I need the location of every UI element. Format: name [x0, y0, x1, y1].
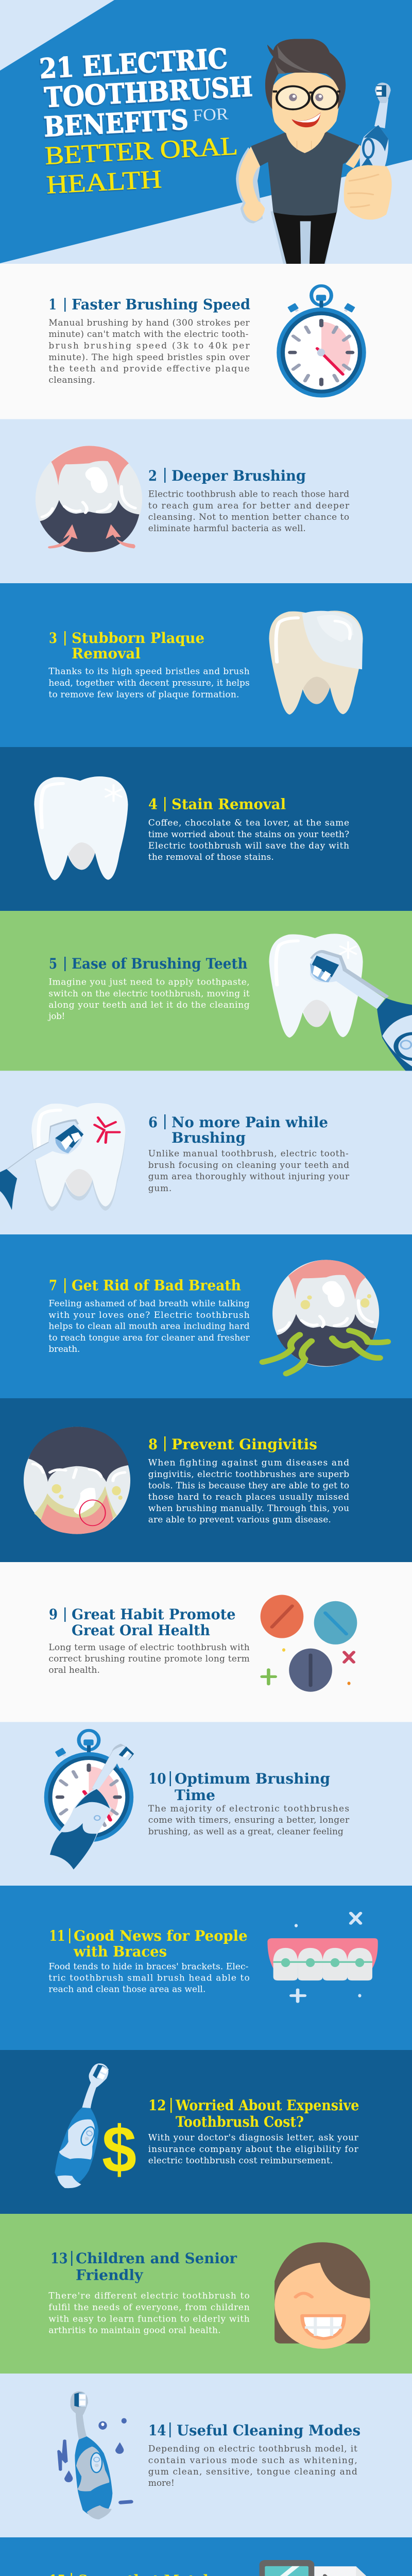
heading: Great Oral Health [72, 1622, 210, 1639]
panel: 12 toothbrush cost [0, 2050, 412, 2214]
panel: hero header [0, 0, 412, 264]
body text: more! [148, 2478, 175, 2488]
heading: 5 [49, 955, 57, 972]
body text: gum area thoroughly without injuring your [148, 1172, 350, 1182]
icon: clean tooth [34, 776, 128, 880]
body text: correct brushing routine promote long term [48, 1654, 250, 1664]
body text: job! [47, 1011, 65, 1022]
body text: brush brushing speed (3k to 40k per [48, 341, 250, 351]
body text: with your loves one? Electric toothbrush [48, 1310, 250, 1320]
body text: head, together with decent pressure, it helps [48, 678, 250, 688]
body text: With your doctor's diagnosis letter, ask your [148, 2133, 359, 2143]
icon: calculator, paper, pen and coin [260, 2560, 378, 2576]
body text: those hard to reach places usually missed [148, 1492, 349, 1502]
body text: gum. [148, 1183, 171, 1194]
body text: Imagine you just need to apply toothpaste, [48, 977, 250, 987]
body text: time worried about the stains on your teeth? [148, 829, 349, 840]
body text [148, 1804, 350, 1837]
heading: Time [175, 1787, 215, 1804]
heading: Brushing [171, 1129, 246, 1146]
body text: gum clean, sensitive, tongue cleaning and [148, 2467, 357, 2477]
icon: teeth with bacteria [263, 1260, 388, 1374]
body text: eliminate harmful bacteria as well. [148, 523, 306, 534]
icon: pills [261, 1595, 357, 1692]
body text: when brushing manually. Through this, you [148, 1503, 349, 1514]
body text: breath. [48, 1344, 80, 1354]
heading: Ease of Brushing Teeth [72, 955, 248, 972]
icon: tooth with toothbrush [269, 934, 412, 1078]
heading: Friendly [76, 2267, 143, 2284]
body text: minute). The high speed bristles spin over [48, 352, 250, 363]
heading: 8 [148, 1436, 158, 1453]
heading: 14 [148, 2422, 166, 2439]
panel: 9 great habit [0, 1562, 412, 1722]
title: better oral health: BETTER ORAL [44, 131, 238, 170]
body text: Food tends to hide in braces' brackets. Elec- [48, 1961, 248, 1972]
heading: No more Pain while [171, 1114, 328, 1131]
title: FOR: FOR [193, 105, 229, 125]
body text [148, 2133, 359, 2166]
body text: gingivitis, electric toothbrushes are superb [148, 1469, 349, 1480]
panel: 2 deeper brushing [0, 419, 412, 583]
body text: the teeth and provide effective plaque [48, 364, 250, 374]
title: better oral health: HEALTH [46, 164, 162, 199]
heading [49, 630, 204, 662]
title: bold white lines: BENEFITS [43, 104, 189, 143]
panel: 11 good news for braces [0, 1886, 412, 2050]
title: bold white lines: 21 ELECTRIC [39, 43, 229, 85]
heading: 2 [148, 467, 157, 484]
heading: Optimum Brushing [175, 1770, 330, 1787]
body text [48, 1961, 250, 1995]
panel: 4 stain removal [0, 747, 412, 911]
heading: 10 [148, 1770, 166, 1787]
heading: Useful Cleaning Modes [177, 2422, 360, 2439]
body text: to reach gum area for better and deeper [148, 501, 350, 511]
heading: Stubborn Plaque [72, 630, 204, 647]
icon: smiling face [274, 2242, 370, 2349]
body text: Unlike manual toothbrush, electric tooth- [148, 1149, 349, 1159]
body text: brushing, as well as a great, cleaner feeling [148, 1826, 344, 1837]
heading: 13 [50, 2250, 68, 2267]
body text: cleansing. [48, 375, 95, 385]
body text [48, 667, 250, 700]
heading: Stain Removal [171, 796, 286, 813]
heading [49, 1606, 236, 1639]
body text: oral health. [48, 1665, 100, 1675]
icon: toothbrush [40, 2060, 133, 2194]
heading: 3 [49, 630, 57, 647]
body text: When fighting against gum diseases and [148, 1458, 349, 1468]
body text: brush focusing on cleaning your teeth and [148, 1160, 349, 1171]
heading: Good News for People [74, 1927, 248, 1944]
title: bold white lines [39, 43, 253, 143]
heading: 4 [148, 796, 158, 813]
panel: 5 ease of brushing teeth [0, 911, 412, 1078]
body text: are able to prevent various gum disease. [148, 1515, 331, 1525]
panel: 1 faster brushing speed [0, 264, 412, 419]
body text: Long term usage of electric toothbrush with [48, 1642, 250, 1653]
illustration: man holding electric toothbrush [236, 39, 392, 264]
body text [148, 1458, 349, 1525]
body text: cleansing. Not to mention better chance to [148, 512, 349, 522]
panel: 8 prevent gingivitis [0, 1398, 412, 1562]
body text [48, 318, 250, 385]
body text [48, 2291, 250, 2336]
heading: 12 [148, 2097, 166, 2114]
body text: tools. This is because they are able to get to [148, 1481, 349, 1491]
heading [50, 2250, 237, 2284]
heading: Worried About Expensive [175, 2097, 359, 2114]
heading: 1 [48, 296, 57, 313]
body text [47, 977, 250, 1022]
body text: insurance company about the eligibility for [148, 2144, 359, 2155]
body text: helps to clean all mouth area including hard [48, 1321, 250, 1332]
body text [148, 489, 350, 534]
body text: There're different electric toothbrush to [48, 2291, 250, 2301]
title: better oral health [44, 131, 238, 199]
heading: 6 [148, 1114, 158, 1131]
heading [148, 1770, 330, 1804]
heading [148, 2097, 359, 2130]
heading [148, 1114, 328, 1146]
body text: fulfil the needs of everyone, from children [48, 2302, 250, 2313]
heading: Get Rid of Bad Breath [72, 1277, 241, 1294]
body text: with easy to learn function to elderly with [48, 2314, 250, 2325]
icon: teeth with braces [267, 1913, 378, 2002]
body text: come with timers, ensuring a better, longer [148, 1815, 350, 1825]
body text: electric toothbrush cost reimbursement. [148, 2156, 333, 2166]
body text: Manual brushing by hand (300 strokes per [48, 318, 250, 328]
body text: The majority of electronic toothbrushes [148, 1804, 349, 1814]
body text [148, 1149, 350, 1194]
body text [148, 2444, 357, 2488]
icon: plaque tooth [269, 611, 363, 715]
heading: Deeper Brushing [171, 467, 306, 484]
heading: with Braces [73, 1943, 167, 1960]
body text: along your teeth and let it do the cleaning [48, 1000, 250, 1010]
heading: Faster Brushing Speed [72, 296, 250, 313]
body text: Depending on electric toothbrush model, it [148, 2444, 357, 2454]
heading: Prevent Gingivitis [171, 1436, 317, 1453]
heading [49, 1927, 248, 1960]
icon: tooth with brush and pain mark [0, 1103, 125, 1227]
body text: to reach tongue area for cleaner and fresher [48, 1333, 250, 1343]
icon: stopwatch with toothbrush [44, 1731, 134, 1873]
body text: arthritis to maintain good oral health. [48, 2326, 221, 2336]
body text: Feeling ashamed of bad breath while talking [48, 1298, 250, 1309]
panel: 6 no more pain [0, 1071, 412, 1234]
icon: toothbrush with water [57, 2391, 133, 2519]
body text: Thanks to its high speed bristles and brush [48, 667, 250, 677]
title [39, 43, 253, 199]
icon: gum disease teeth [24, 1427, 130, 1534]
heading: Great Habit Promote [72, 1606, 236, 1623]
heading: 9 [49, 1606, 58, 1623]
heading: Removal [72, 645, 141, 662]
panel: 14 cleaning modes [0, 2374, 412, 2537]
icon: stopwatch [277, 286, 366, 397]
icon: dollar sign: $ [102, 2113, 136, 2187]
body text: contain various mode such as whitening, [148, 2455, 357, 2466]
body text: Electric toothbrush will save the day with [148, 841, 349, 851]
heading: 7 [49, 1277, 57, 1294]
panel: 10 optimum brushing time [0, 1722, 412, 1886]
heading: Children and Senior [76, 2250, 237, 2267]
body text [48, 1298, 250, 1354]
body text: minute) can't match with the electric tooth- [48, 329, 248, 340]
body text: the removal of those stains. [148, 852, 274, 862]
panel: 15 specs and budget [0, 2537, 412, 2576]
panel: 7 bad breath [0, 1234, 412, 1398]
body text [48, 1642, 250, 1675]
body text: to remove few layers of plaque formation. [48, 689, 239, 700]
heading: Toothbrush Cost? [176, 2113, 304, 2130]
body text: reach and clean those area as well. [48, 1985, 205, 1995]
icon: teeth with arrows [36, 446, 142, 553]
body text: Electric toothbrush able to reach those hard [148, 489, 349, 500]
title: bold white lines: TOOTHBRUSH [43, 71, 253, 114]
body text: Coffee, chocolate & tea lover, at the same [148, 818, 349, 828]
body text: switch on the electric toothbrush, moving it [48, 989, 250, 999]
body text: tric toothbrush small brush head able to [48, 1973, 250, 1984]
panel: 3 stubborn plaque removal [0, 583, 412, 747]
panel: 13 children and senior friendly [0, 2214, 412, 2374]
heading: 11 [49, 1927, 65, 1944]
body text [148, 818, 349, 862]
